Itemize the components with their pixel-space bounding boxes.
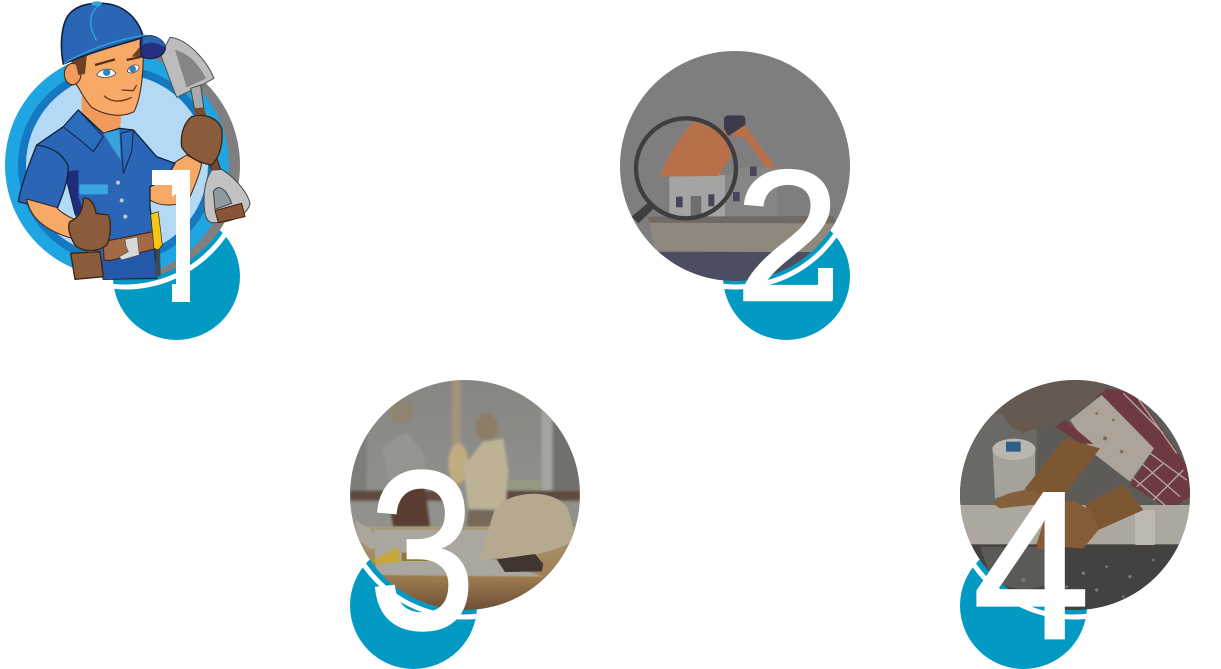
photo background [620, 51, 850, 281]
plaid stripes [1123, 393, 1187, 507]
hand right [1037, 501, 1098, 550]
right glove [181, 115, 222, 165]
hair right [132, 47, 143, 57]
step 3 [350, 380, 580, 669]
magnifying glass [632, 118, 736, 223]
teal circle 3 [350, 542, 477, 669]
pouch [71, 252, 103, 279]
arm right [1085, 484, 1143, 530]
visor rim [143, 36, 165, 47]
photo background [350, 380, 580, 610]
ground [970, 544, 1180, 610]
right forearm [150, 155, 202, 205]
neck [82, 97, 123, 140]
book body [649, 223, 843, 253]
left sleeve [18, 145, 68, 208]
ear [64, 63, 81, 85]
big white pipe [1070, 395, 1154, 482]
left forearm [27, 199, 77, 238]
belt [103, 232, 157, 261]
head [75, 37, 143, 115]
house wall [723, 167, 777, 217]
buttons [116, 181, 127, 219]
pipe stains [1095, 412, 1123, 453]
plaid sleeve upper [1097, 388, 1190, 510]
pipe coupling [1135, 510, 1155, 545]
collar [63, 110, 133, 173]
photo background [960, 380, 1190, 610]
numeral 3: 3 [369, 426, 476, 669]
screwdriver [151, 212, 162, 276]
numeral 1 [152, 170, 190, 302]
plaid sleeve left [1055, 420, 1093, 444]
cap visor [140, 36, 165, 59]
gray backing circle 1 [10, 50, 240, 280]
book top [647, 216, 837, 223]
white crescent 1 [114, 233, 226, 290]
hard hat [477, 494, 574, 559]
mechanic illustration [18, 1, 250, 279]
fur [997, 380, 1107, 433]
paint can [992, 439, 1036, 498]
numeral 1: 1 [132, 132, 236, 341]
buckle [119, 237, 139, 260]
teal circle 4 [960, 542, 1087, 669]
step 2 [620, 51, 850, 340]
blueprints [373, 530, 543, 577]
white crescent 3 [362, 564, 476, 620]
ground speckles [1021, 559, 1155, 598]
dark base [658, 252, 812, 281]
calculator [497, 554, 543, 572]
white crescent 4 [972, 564, 1086, 620]
tape measure [402, 553, 432, 561]
step 4 [960, 380, 1190, 669]
shirt shadow [65, 170, 87, 220]
windows [676, 167, 757, 217]
yellow ruler [373, 547, 400, 565]
eyes [95, 57, 142, 77]
horizontal pipe [960, 505, 1190, 544]
step 1 [4, 1, 250, 341]
left glove [69, 198, 110, 251]
teal circle 1 [113, 213, 240, 340]
cap seam [64, 5, 147, 63]
photo: worker fitting a plastic pipe [960, 380, 1190, 610]
hand left [993, 491, 1047, 508]
photo: engineers meeting at a table [350, 380, 580, 610]
white crescent 2 [724, 234, 836, 290]
numeral 2: 2 [735, 132, 841, 340]
roof [659, 122, 735, 177]
shovel [161, 37, 250, 223]
upper arm [1025, 438, 1100, 503]
undershirt [103, 129, 121, 160]
teal circle 2 [723, 213, 850, 340]
paper roll [355, 520, 375, 550]
pocket [79, 184, 108, 194]
ground gravel [980, 546, 1044, 590]
roof back [730, 125, 777, 168]
trousers [102, 245, 157, 279]
shirt [37, 110, 175, 279]
cap button [91, 1, 102, 6]
chimney [724, 115, 745, 135]
blue badge circle [5, 53, 229, 277]
cap [61, 3, 143, 64]
table [350, 527, 580, 613]
photo scene people and window [350, 380, 580, 530]
hair [68, 50, 87, 75]
gravel left [960, 413, 1037, 505]
photo: house under magnifying glass [620, 51, 850, 281]
house wall front [669, 175, 725, 217]
smile [104, 85, 137, 101]
